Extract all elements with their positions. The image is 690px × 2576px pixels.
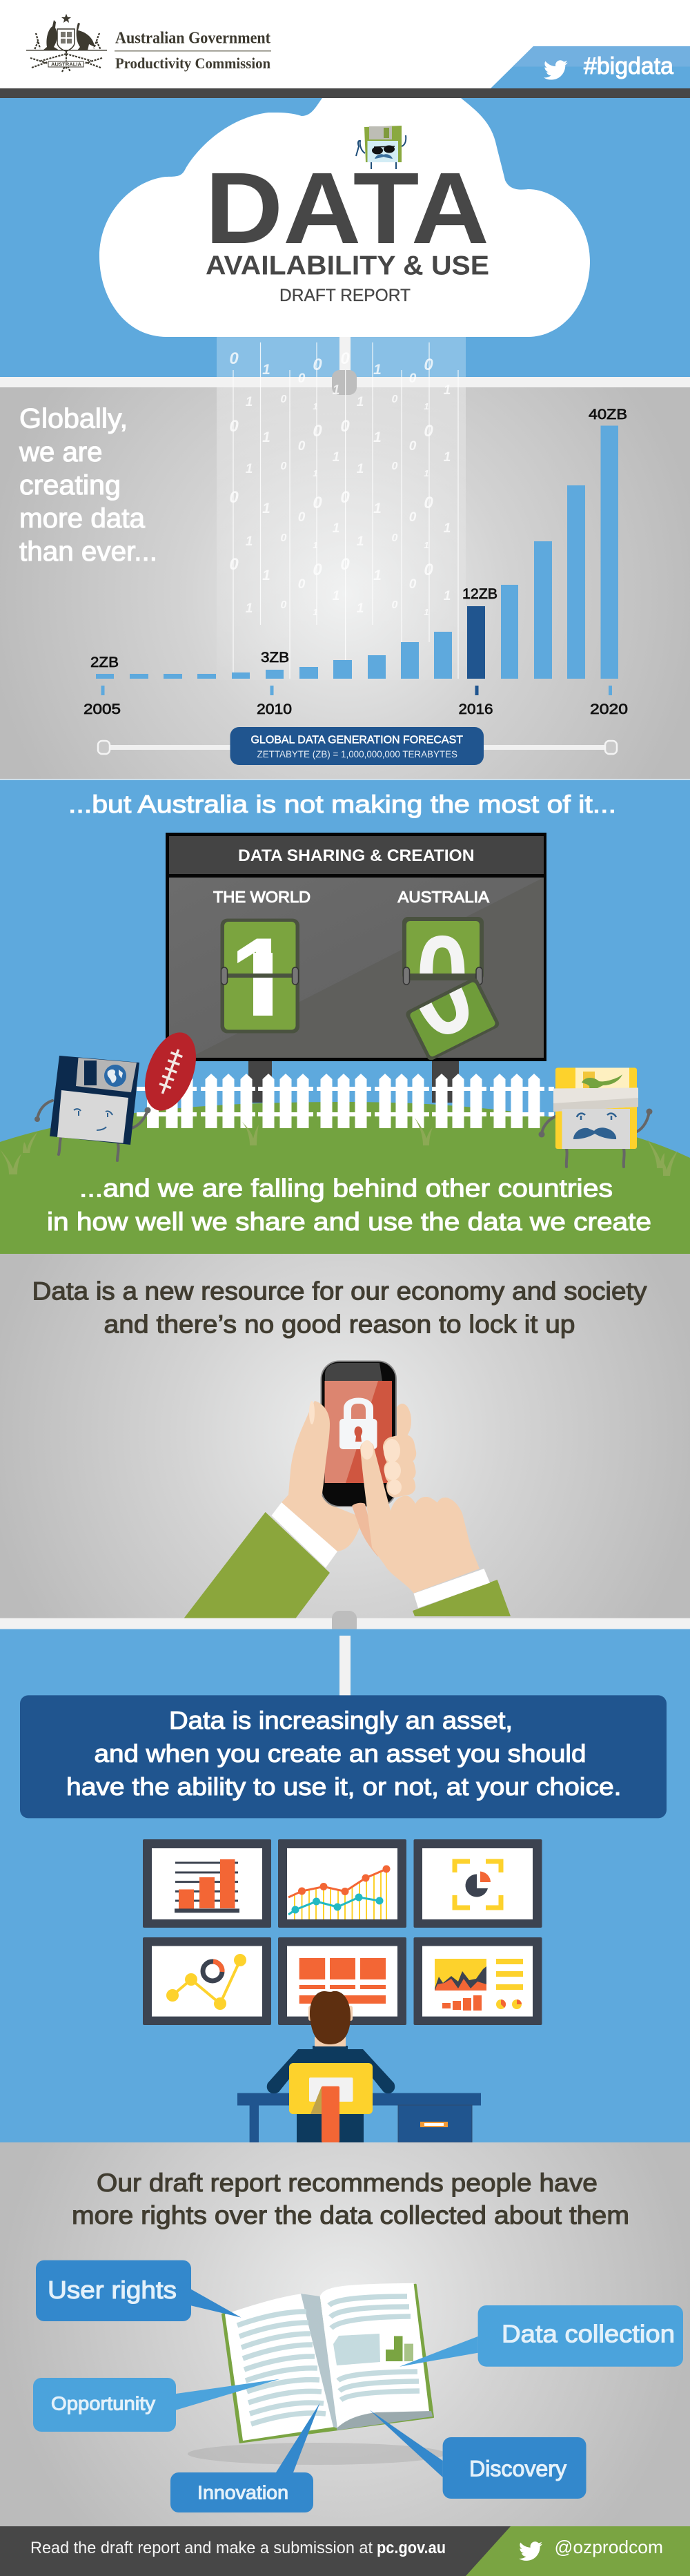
- heading: Our draft report recommends people have: [97, 2169, 598, 2197]
- fingers: [381, 1433, 418, 1499]
- callout: user rights: User rights: [48, 2276, 177, 2304]
- value labels: [90, 407, 627, 670]
- year labels: 2005: [83, 701, 121, 717]
- connector band: [0, 1611, 690, 1696]
- monitor: bar chart: [143, 1839, 271, 1928]
- call to action: Read the draft report and make a submission at: [30, 2539, 373, 2557]
- value labels: 12ZB: [462, 586, 497, 602]
- panel text: Globally,: [19, 404, 128, 434]
- title: AVAILABILITY & USE: [206, 251, 489, 280]
- logo text: [115, 29, 271, 72]
- logo: Australian coat of arms: [26, 14, 107, 72]
- value labels: 3ZB: [261, 650, 289, 666]
- value labels: 2ZB: [90, 655, 119, 670]
- monitor: orange blocks: [278, 1937, 406, 2025]
- callout: data collection: [400, 2305, 683, 2367]
- icon: red football: [135, 1025, 206, 1118]
- closing text: in how well we share and use the data we create: [47, 1208, 651, 1236]
- left cuff: [272, 1502, 337, 1568]
- falling flip card: 0: [387, 929, 493, 1065]
- header: [0, 0, 690, 98]
- monitor: zigzag with donut: [143, 1937, 271, 2025]
- bar chart: global data generation forecast: [83, 407, 628, 765]
- twitter handle: @ozprodcom: [555, 2537, 663, 2557]
- hashtag tab: [491, 46, 690, 88]
- heading: [32, 1277, 647, 1338]
- panel: data is an asset: [0, 1629, 690, 2142]
- heading: and there’s no good reason to lock it up: [103, 1310, 575, 1338]
- callout: opportunity: Opportunity: [51, 2393, 155, 2414]
- score card: Australia: 0: [416, 913, 469, 1038]
- desk with drawer: [237, 2093, 481, 2142]
- year labels: 2020: [590, 701, 628, 717]
- panel text: we are: [19, 437, 103, 467]
- call to action: pc.gov.au: [377, 2539, 446, 2557]
- panel text: than ever...: [19, 536, 157, 567]
- falling flip card: [406, 978, 500, 1061]
- heading: more rights over the data collected about them: [72, 2201, 629, 2229]
- callout: opportunity: [33, 2378, 280, 2432]
- right sleeve: [413, 1580, 511, 1616]
- closing text: ...and we are falling behind other countries: [79, 1174, 613, 1203]
- illustration: hands unlocking phone: [184, 1362, 511, 1618]
- panel text: more data: [19, 503, 146, 534]
- heading: ...but Australia is not making the most of it...: [68, 790, 616, 818]
- callout: discovery: [370, 2410, 586, 2499]
- data stream falling from cloud: 11111111: [333, 383, 451, 603]
- icon: twitter bird: [519, 2541, 542, 2561]
- data stream falling from cloud: 11111111: [313, 401, 429, 617]
- callout: user rights: [36, 2260, 241, 2321]
- data stream falling from cloud: [0, 337, 690, 679]
- character: yellow floppy disk with bandage: [538, 1067, 653, 1167]
- panel: data is a new resource: [0, 1254, 690, 1618]
- scoreboard: DATA SHARING & CREATION: [238, 846, 475, 865]
- year labels: 2010: [257, 701, 292, 717]
- data stream falling from cloud: 00000000: [281, 394, 398, 611]
- score card: Australia: [402, 917, 500, 1061]
- monitor: dashboard: [414, 1937, 542, 2025]
- title: [205, 152, 489, 305]
- value labels: 40ZB: [589, 407, 627, 423]
- monitor: pie focus: [414, 1839, 542, 1928]
- icon: phone with padlock: [322, 1362, 396, 1507]
- panel text: creating: [19, 470, 121, 501]
- callout: discovery: Discovery: [469, 2457, 566, 2481]
- pointing hand: [352, 1503, 378, 1557]
- title: DATA: [205, 152, 489, 265]
- callout: innovation: Innovation: [197, 2481, 288, 2503]
- left thumb: [304, 1401, 330, 1498]
- panel: title cloud on blue sky: [0, 98, 690, 377]
- panel text: [19, 404, 157, 567]
- panel: Australia not making the most of it: [0, 780, 690, 1254]
- title: DRAFT REPORT: [279, 286, 411, 305]
- hashtag: #bigdata: [584, 53, 673, 79]
- cloud: [99, 98, 590, 337]
- icon: green floppy mascot: [356, 126, 406, 169]
- legend slider: [98, 727, 617, 765]
- panel: draft report recommendations: [0, 2142, 690, 2526]
- data stream falling from cloud: 11111111: [262, 362, 382, 583]
- logo text: Productivity Commission: [115, 55, 270, 72]
- icon: twitter bird: [544, 60, 568, 80]
- character: navy floppy disk with football: [34, 1025, 206, 1161]
- white picket fence: [137, 1074, 554, 1128]
- grass tufts: [0, 1118, 678, 1176]
- logo text: Australian Government: [115, 29, 270, 47]
- statement box: and when you create an asset you should: [94, 1739, 586, 1768]
- scoreboard: THE WORLD: [213, 888, 310, 906]
- data stream falling from cloud: 00000000: [229, 349, 350, 574]
- score card: the world: 1: [230, 915, 292, 1040]
- data stream falling from cloud: 00000000: [298, 371, 417, 592]
- year labels: 2016: [458, 701, 493, 717]
- logo: Australian coat of arms: AUSTRALIA: [51, 62, 81, 68]
- scoreboard: AUSTRALIA: [397, 888, 490, 906]
- panel: globally we are creating more data: [0, 387, 690, 780]
- statement box: have the ability to use it, or not, at your choice.: [66, 1772, 621, 1801]
- footer: [0, 2526, 690, 2576]
- callout: innovation: [170, 2403, 320, 2512]
- statement box: Data is increasingly an asset,: [169, 1706, 513, 1734]
- data stream falling from cloud: 00000000: [313, 356, 433, 579]
- legend slider: GLOBAL DATA GENERATION FORECAST: [251, 735, 463, 746]
- green hill: [0, 1102, 690, 1254]
- year labels: [83, 701, 628, 717]
- person at desk: [267, 1991, 395, 2142]
- left sleeve: [184, 1512, 330, 1618]
- heading: Data is a new resource for our economy and society: [32, 1277, 647, 1305]
- callout: data collection: Data collection: [502, 2320, 675, 2347]
- icon: open book: [188, 2283, 446, 2465]
- scoreboard: [166, 833, 546, 1069]
- monitor: line chart: [278, 1839, 406, 1928]
- data stream falling from cloud: 11111111: [246, 395, 364, 616]
- year ticks: [101, 686, 612, 695]
- legend slider: ZETTABYTE (ZB) = 1,000,000,000 TERABYTES: [257, 749, 457, 759]
- closing text: [47, 1174, 651, 1236]
- right cuff: [414, 1569, 490, 1608]
- scoreboard posts: [248, 1061, 459, 1103]
- statement box: [20, 1695, 667, 1818]
- heading: [72, 2169, 629, 2229]
